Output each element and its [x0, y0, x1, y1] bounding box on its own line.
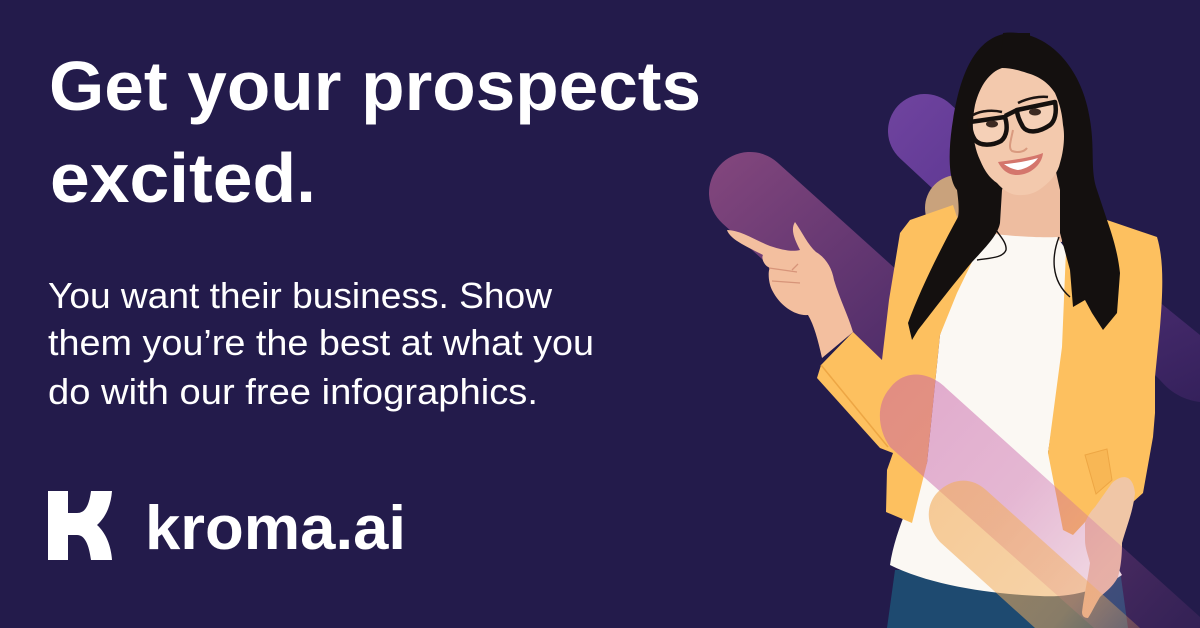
- eyebrows: [973, 97, 1048, 115]
- right hand: [1082, 477, 1135, 618]
- forearm and pointing hand: [727, 222, 853, 358]
- finger details: [769, 264, 800, 283]
- smile: [998, 153, 1043, 175]
- jacket pocket: [1085, 449, 1112, 494]
- logo: [48, 491, 406, 563]
- neck: [990, 170, 1062, 242]
- headline: excited.: [50, 139, 316, 217]
- left hair lock: [908, 33, 1030, 340]
- sleeve fold: [821, 365, 888, 447]
- headline: [49, 47, 701, 217]
- translucent overlay capsules: [880, 374, 1200, 628]
- teeth: [1004, 158, 1038, 170]
- body text: [48, 275, 594, 412]
- white shirt: [890, 232, 1122, 596]
- wordmark: kroma.ai: [145, 494, 406, 563]
- thin hair wisps: [977, 230, 1070, 297]
- right hair lock: [1000, 33, 1120, 330]
- icon: K mark: [48, 491, 112, 560]
- right side of jacket and sleeve: [1048, 220, 1162, 535]
- jeans: [887, 570, 1128, 628]
- headline: Get your prospects: [49, 47, 701, 125]
- body text: You want their business. Show: [48, 275, 553, 316]
- body text: do with our free infographics.: [48, 371, 538, 412]
- glasses: [970, 102, 1056, 145]
- face: [973, 68, 1064, 195]
- body text: them you’re the best at what you: [48, 322, 594, 363]
- eyes: [986, 108, 1041, 128]
- left side of jacket and sleeve: [817, 205, 972, 523]
- woman: [727, 33, 1162, 628]
- decorative capsules behind the woman: [750, 131, 1200, 427]
- nose: [1010, 130, 1027, 152]
